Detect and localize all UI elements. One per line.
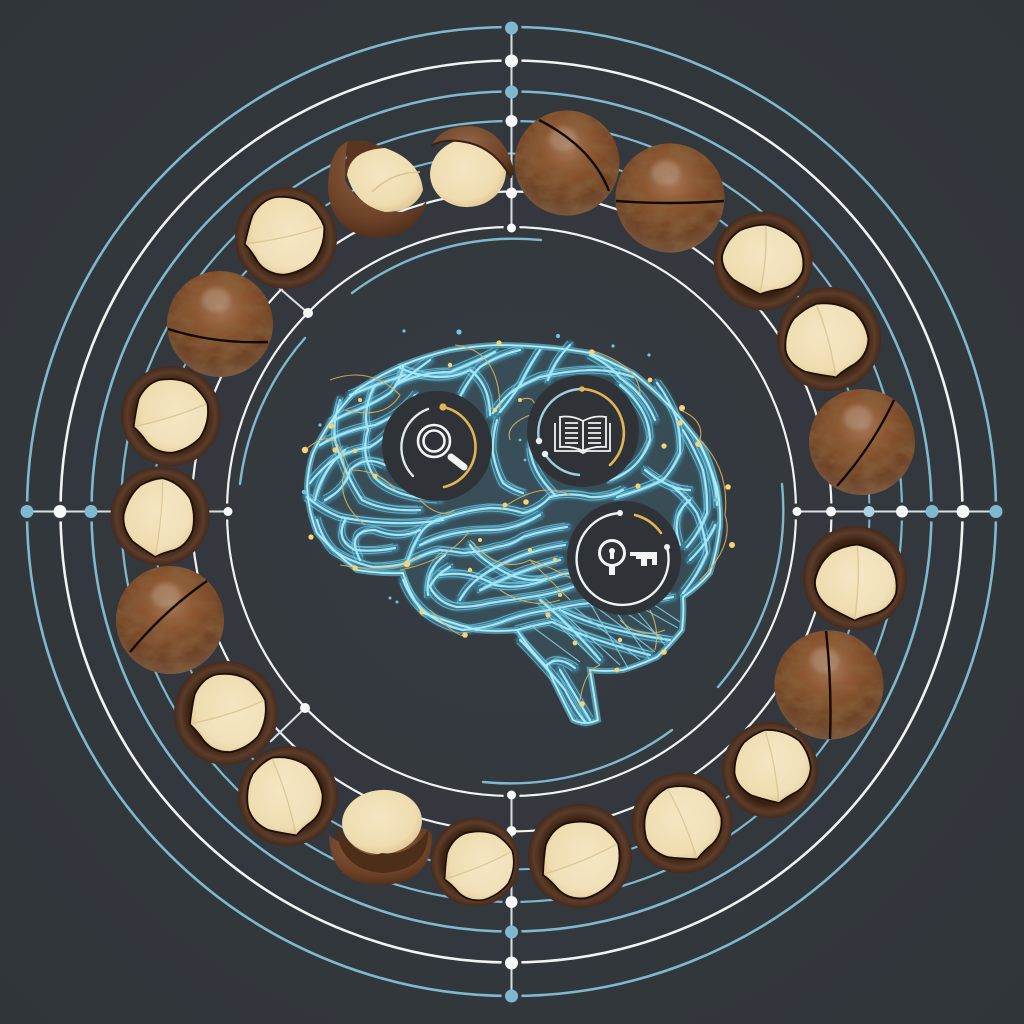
- nut: whole, upper left: [167, 271, 273, 377]
- nut: cup with kernel, bottom: [329, 787, 432, 885]
- macadamia nut ring: [110, 111, 915, 911]
- nut: kernel with cap: [426, 126, 514, 212]
- key glyph: [600, 540, 657, 575]
- nut: open: [236, 746, 338, 847]
- brain: translucent body: [307, 345, 720, 723]
- nut: open: [174, 661, 278, 765]
- nut: open: [430, 818, 526, 911]
- brain: gold nodes: [302, 340, 735, 707]
- nut: open: [803, 526, 907, 630]
- nut: open: [121, 366, 221, 466]
- nut: whole, lower left: [116, 566, 224, 674]
- nut: open shell with kernel: [328, 140, 427, 238]
- progress arcs: [443, 407, 476, 487]
- nut: whole, right: [809, 389, 915, 495]
- nut: open: [110, 466, 210, 566]
- icon: key and keyhole: [567, 501, 681, 615]
- brain: glow folds: [307, 345, 717, 722]
- brain: blue particles: [302, 329, 718, 604]
- brain: bright folds: [307, 345, 717, 722]
- disc: [382, 391, 492, 501]
- nut: open: [631, 772, 733, 874]
- disc: [567, 501, 681, 615]
- disc: [527, 375, 639, 487]
- nut: open: [776, 287, 881, 391]
- inner blue arc segments: [240, 239, 783, 783]
- brain: cerebellum hatching: [530, 602, 680, 668]
- icon: magnifying glass: [382, 391, 492, 501]
- nut: whole, top: [515, 111, 619, 215]
- nut: whole, lower right: [774, 630, 884, 740]
- nut: open: [235, 187, 337, 289]
- nut: open: [528, 804, 633, 911]
- brain illustration: [302, 329, 735, 725]
- brain: fine strands: [304, 341, 720, 725]
- nut: open: [722, 722, 818, 818]
- book glyph: [555, 416, 610, 453]
- nut: open: [714, 212, 812, 310]
- brain: outer highlight: [307, 345, 720, 723]
- progress arcs: [577, 513, 669, 605]
- magnifier glyph: [418, 425, 464, 467]
- icon: open book: [527, 375, 639, 487]
- brain: gold neural threads: [305, 345, 727, 700]
- progress arcs: [582, 389, 624, 465]
- nut: whole, top right: [615, 143, 725, 253]
